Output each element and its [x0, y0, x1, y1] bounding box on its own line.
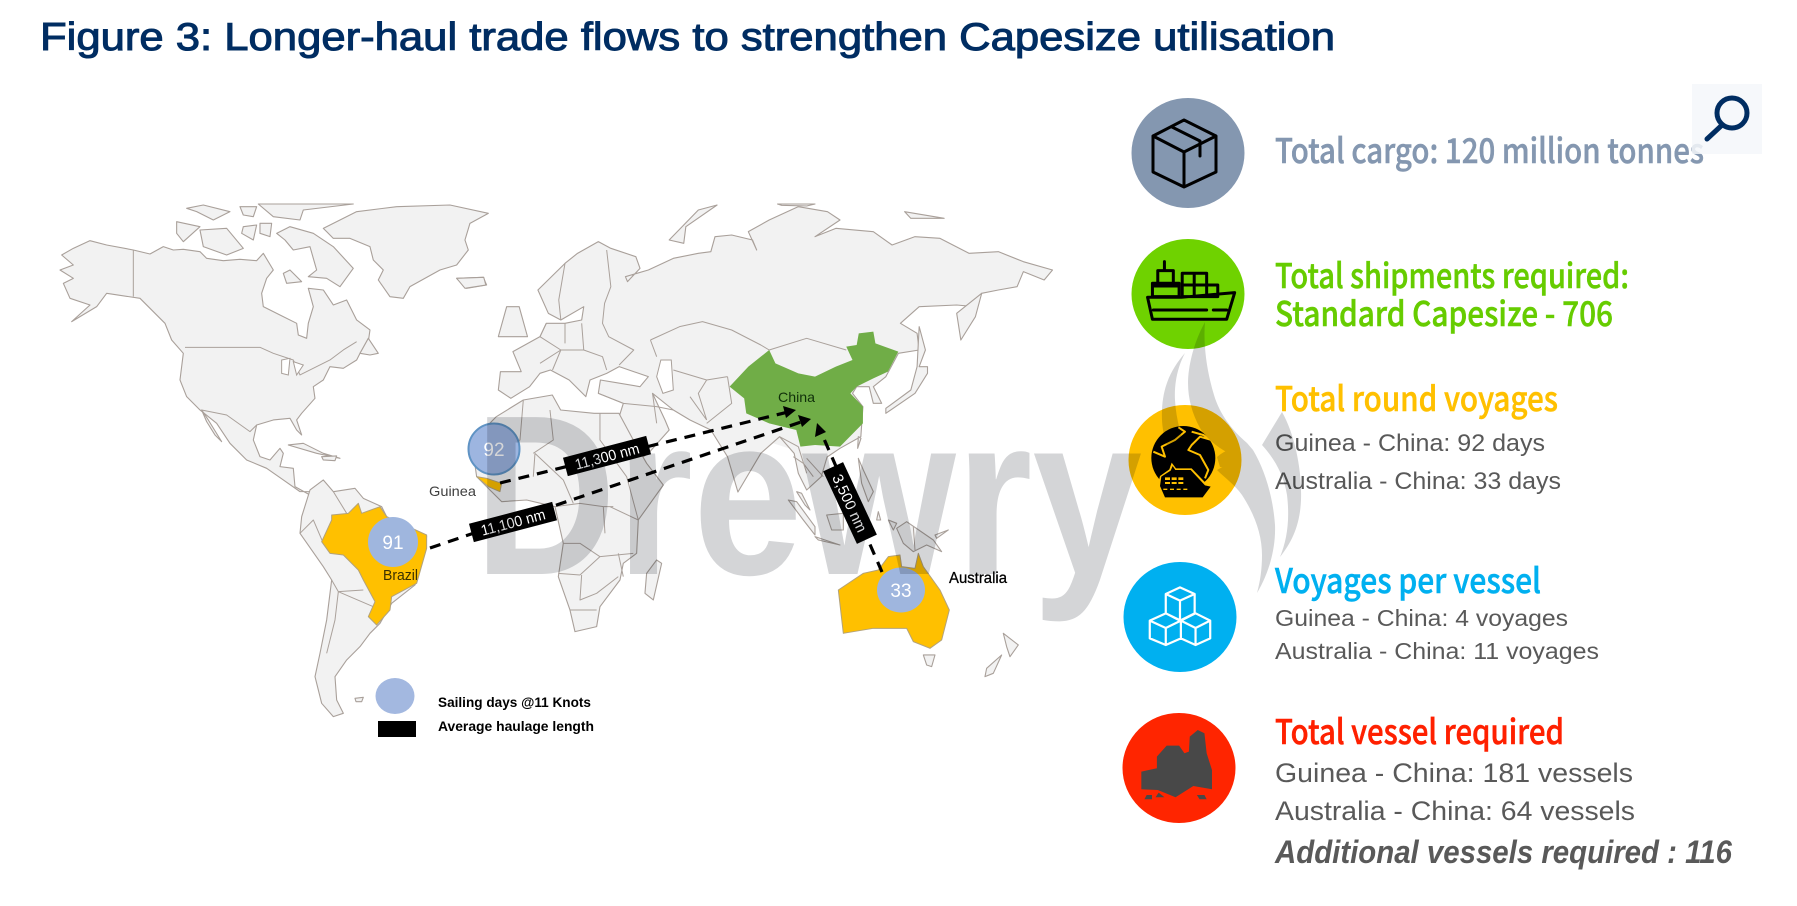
icon: cardboard box [1132, 98, 1244, 208]
panel: total vessel required [1122, 705, 1732, 870]
text: total round voyages: Guinea - China: 92 days [1275, 430, 1545, 457]
sailing days bubble: Brazil 91 [368, 517, 418, 567]
text: total round voyages: Australia - China: 33 days [1275, 468, 1561, 495]
text: total shipments [1275, 249, 1629, 336]
route: Guinea to China arrow [500, 406, 796, 483]
text: voyages per vessel: Voyages per vessel [1274, 554, 1541, 603]
map: Eurasia [457, 204, 1053, 492]
panel: total round voyages [1128, 372, 1561, 515]
text: total vessel required: Additional vessels required : 116 [1274, 834, 1732, 870]
map: South America and Africa [300, 395, 663, 717]
haulage label: 11,100 nm: 11,100 nm [479, 506, 547, 540]
text: voyages per vessel: Australia - China: 11 voyages [1275, 638, 1599, 664]
legend [376, 678, 594, 737]
haulage label: 11,300 nm [563, 436, 651, 476]
text: total round voyages [1275, 372, 1561, 495]
haulage label: 11,300 nm: 11,300 nm [573, 440, 641, 474]
haulage label: 3,500 nm [823, 462, 877, 544]
panel: world map [60, 204, 1053, 737]
sailing days bubble: Australia 33 [877, 568, 925, 612]
search button [1692, 84, 1762, 154]
legend: average haulage length: Average haulage length [438, 718, 594, 734]
map: South East Asia and Oceania [788, 437, 1018, 677]
haulage label: 11,100 nm [469, 502, 557, 542]
label: Guinea: Guinea [429, 483, 476, 499]
icon: globe and ship [1128, 405, 1242, 515]
panel: total shipments [1132, 239, 1629, 349]
sailing days bubble: Guinea 92 [468, 424, 520, 474]
text: total cargo: Total cargo: 120 million tonnes [1275, 124, 1704, 173]
text: total vessel required: Guinea - China: 181 vessels [1275, 758, 1633, 788]
panel: total cargo [1132, 98, 1704, 208]
text: total shipments: Total shipments required: [1275, 249, 1629, 298]
label: China: China [778, 389, 815, 405]
label: Australia: Australia [949, 570, 1007, 587]
legend: average haulage length [378, 718, 594, 737]
legend: sailing days [376, 678, 591, 714]
text: total vessel required: Australia - China: 64 vessels [1275, 796, 1635, 826]
text: total vessel required: Total vessel required [1275, 705, 1564, 754]
legend: sailing days: Sailing days @11 Knots [438, 694, 591, 710]
panel: voyages per vessel [1124, 554, 1599, 672]
text: voyages per vessel: Guinea - China: 4 voyages [1275, 605, 1568, 631]
label: Brazil: Brazil [383, 567, 418, 584]
sailing days bubble: Brazil 91: 91 [382, 533, 404, 554]
text: total round voyages: Total round voyages [1275, 372, 1558, 421]
icon: rocks [1122, 713, 1236, 823]
sailing days bubble: Australia 33: 33 [890, 581, 912, 602]
text: total vessel required [1274, 705, 1732, 870]
sailing days bubble: Guinea 92: 92 [483, 440, 505, 461]
title: Figure 3: Longer-haul trade flows to strengthen Capesize utilisation [40, 16, 1335, 59]
icon: container ship [1132, 239, 1244, 349]
text: voyages per vessel [1274, 554, 1599, 664]
text: total shipments: Standard Capesize - 706 [1275, 287, 1613, 336]
map: North America and Greenland [60, 204, 488, 495]
route: Brazil to China arrow [430, 415, 811, 548]
watermark: Drewry logo: Drewry [474, 369, 1142, 623]
haulage label: 3,500 nm: 3,500 nm [828, 472, 870, 535]
icon: stacked cubes [1124, 562, 1236, 672]
route: Australia to China arrow [815, 423, 882, 572]
